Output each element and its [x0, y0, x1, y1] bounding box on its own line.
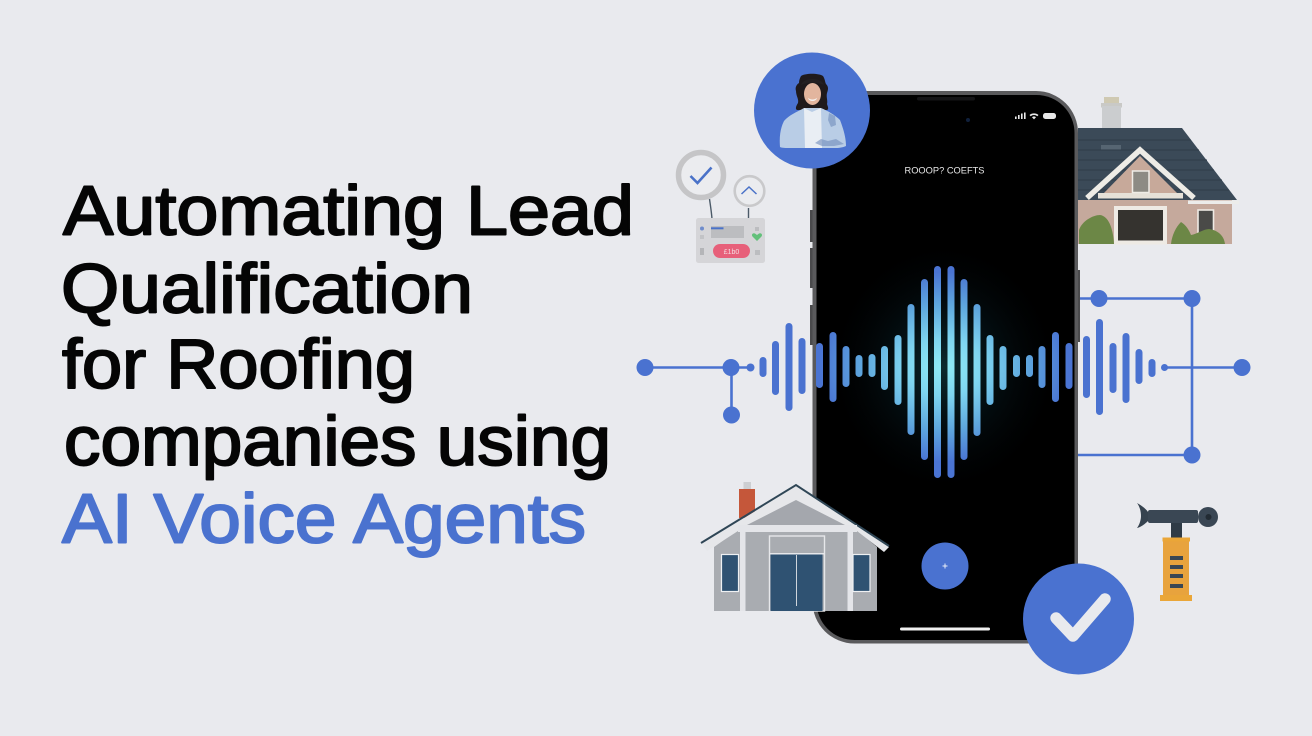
gable: [747, 500, 845, 525]
jacket emblem: [815, 113, 844, 146]
status icons: [1015, 112, 1056, 119]
large check badge: [678, 152, 724, 198]
shrubs: [1079, 215, 1225, 244]
face: [804, 83, 821, 105]
checklist illustration: [678, 152, 765, 263]
phone: [810, 91, 1080, 644]
hair: [796, 74, 828, 110]
double door: [770, 553, 824, 611]
phone screen: [816, 95, 1074, 640]
waveform outside phone, right: [1083, 319, 1156, 415]
eave trim: [1188, 200, 1239, 204]
roof courses: [1078, 140, 1229, 190]
nozzle: [1137, 503, 1148, 528]
roof band: [702, 486, 889, 552]
wall: [1078, 200, 1232, 244]
icon: roofing tool: [1137, 503, 1218, 601]
stem: [1171, 523, 1182, 538]
title line 1: Automating Lead: [63, 172, 634, 250]
title line 2: Qualification: [61, 249, 473, 327]
shirt: [804, 108, 822, 148]
door frame: [770, 536, 824, 611]
beam: [738, 525, 857, 532]
title line 4: companies using: [64, 402, 611, 480]
icon: suburban house, top right: [1078, 97, 1239, 244]
roof edge: [701, 485, 889, 546]
field value: [711, 227, 724, 229]
phone heading: ROOOP? COEFTS: [904, 166, 984, 176]
form field: [711, 226, 744, 238]
side window: [1198, 210, 1214, 237]
left column: [740, 532, 746, 611]
field bullets: [700, 226, 760, 255]
form card: [696, 218, 765, 263]
base: [1160, 595, 1192, 601]
smile: [808, 98, 817, 101]
right window: [853, 554, 870, 592]
icon: check badge: [1023, 564, 1134, 674]
camera: [966, 118, 970, 122]
small chevron badge: [735, 176, 764, 206]
waveform on screen: [816, 266, 1072, 478]
barrel: [1148, 510, 1198, 523]
left connector lines: [636, 359, 754, 424]
waveform outside phone, left: [760, 323, 806, 411]
status heart: [752, 233, 762, 241]
grip slots: [1170, 556, 1183, 588]
plus button: [922, 542, 968, 590]
connector wires: [710, 199, 748, 219]
cap band: [801, 79, 824, 85]
head: [1198, 507, 1218, 527]
gable beam: [1098, 193, 1183, 198]
slate roof: [1078, 128, 1237, 200]
title: [61, 172, 634, 557]
title line 3: for Roofing: [62, 325, 415, 403]
notch: [917, 97, 975, 100]
right connector lines: [1078, 290, 1250, 464]
jacket: [780, 108, 846, 148]
icon: agent avatar: [754, 52, 870, 168]
red action button: £1b0: [724, 249, 739, 256]
attic window: [1132, 171, 1149, 192]
icon: grey bungalow, bottom left: [701, 482, 889, 611]
cap: [1162, 538, 1190, 542]
chimney: [1101, 97, 1122, 145]
phone body: [812, 91, 1078, 644]
gable trim: [1087, 150, 1194, 198]
handle: [1163, 538, 1189, 597]
front window door: [1116, 208, 1165, 242]
chimney: [739, 482, 755, 518]
home indicator: [900, 628, 990, 630]
title line 5: highlighted: AI Voice Agents: [62, 479, 586, 557]
walls: [714, 530, 877, 611]
chimney flashing: [1101, 145, 1121, 150]
phone side buttons: [810, 210, 1080, 345]
waveform glow: [834, 247, 1054, 487]
left window: [722, 554, 738, 592]
gable face: [1103, 156, 1178, 194]
right column: [848, 532, 853, 611]
